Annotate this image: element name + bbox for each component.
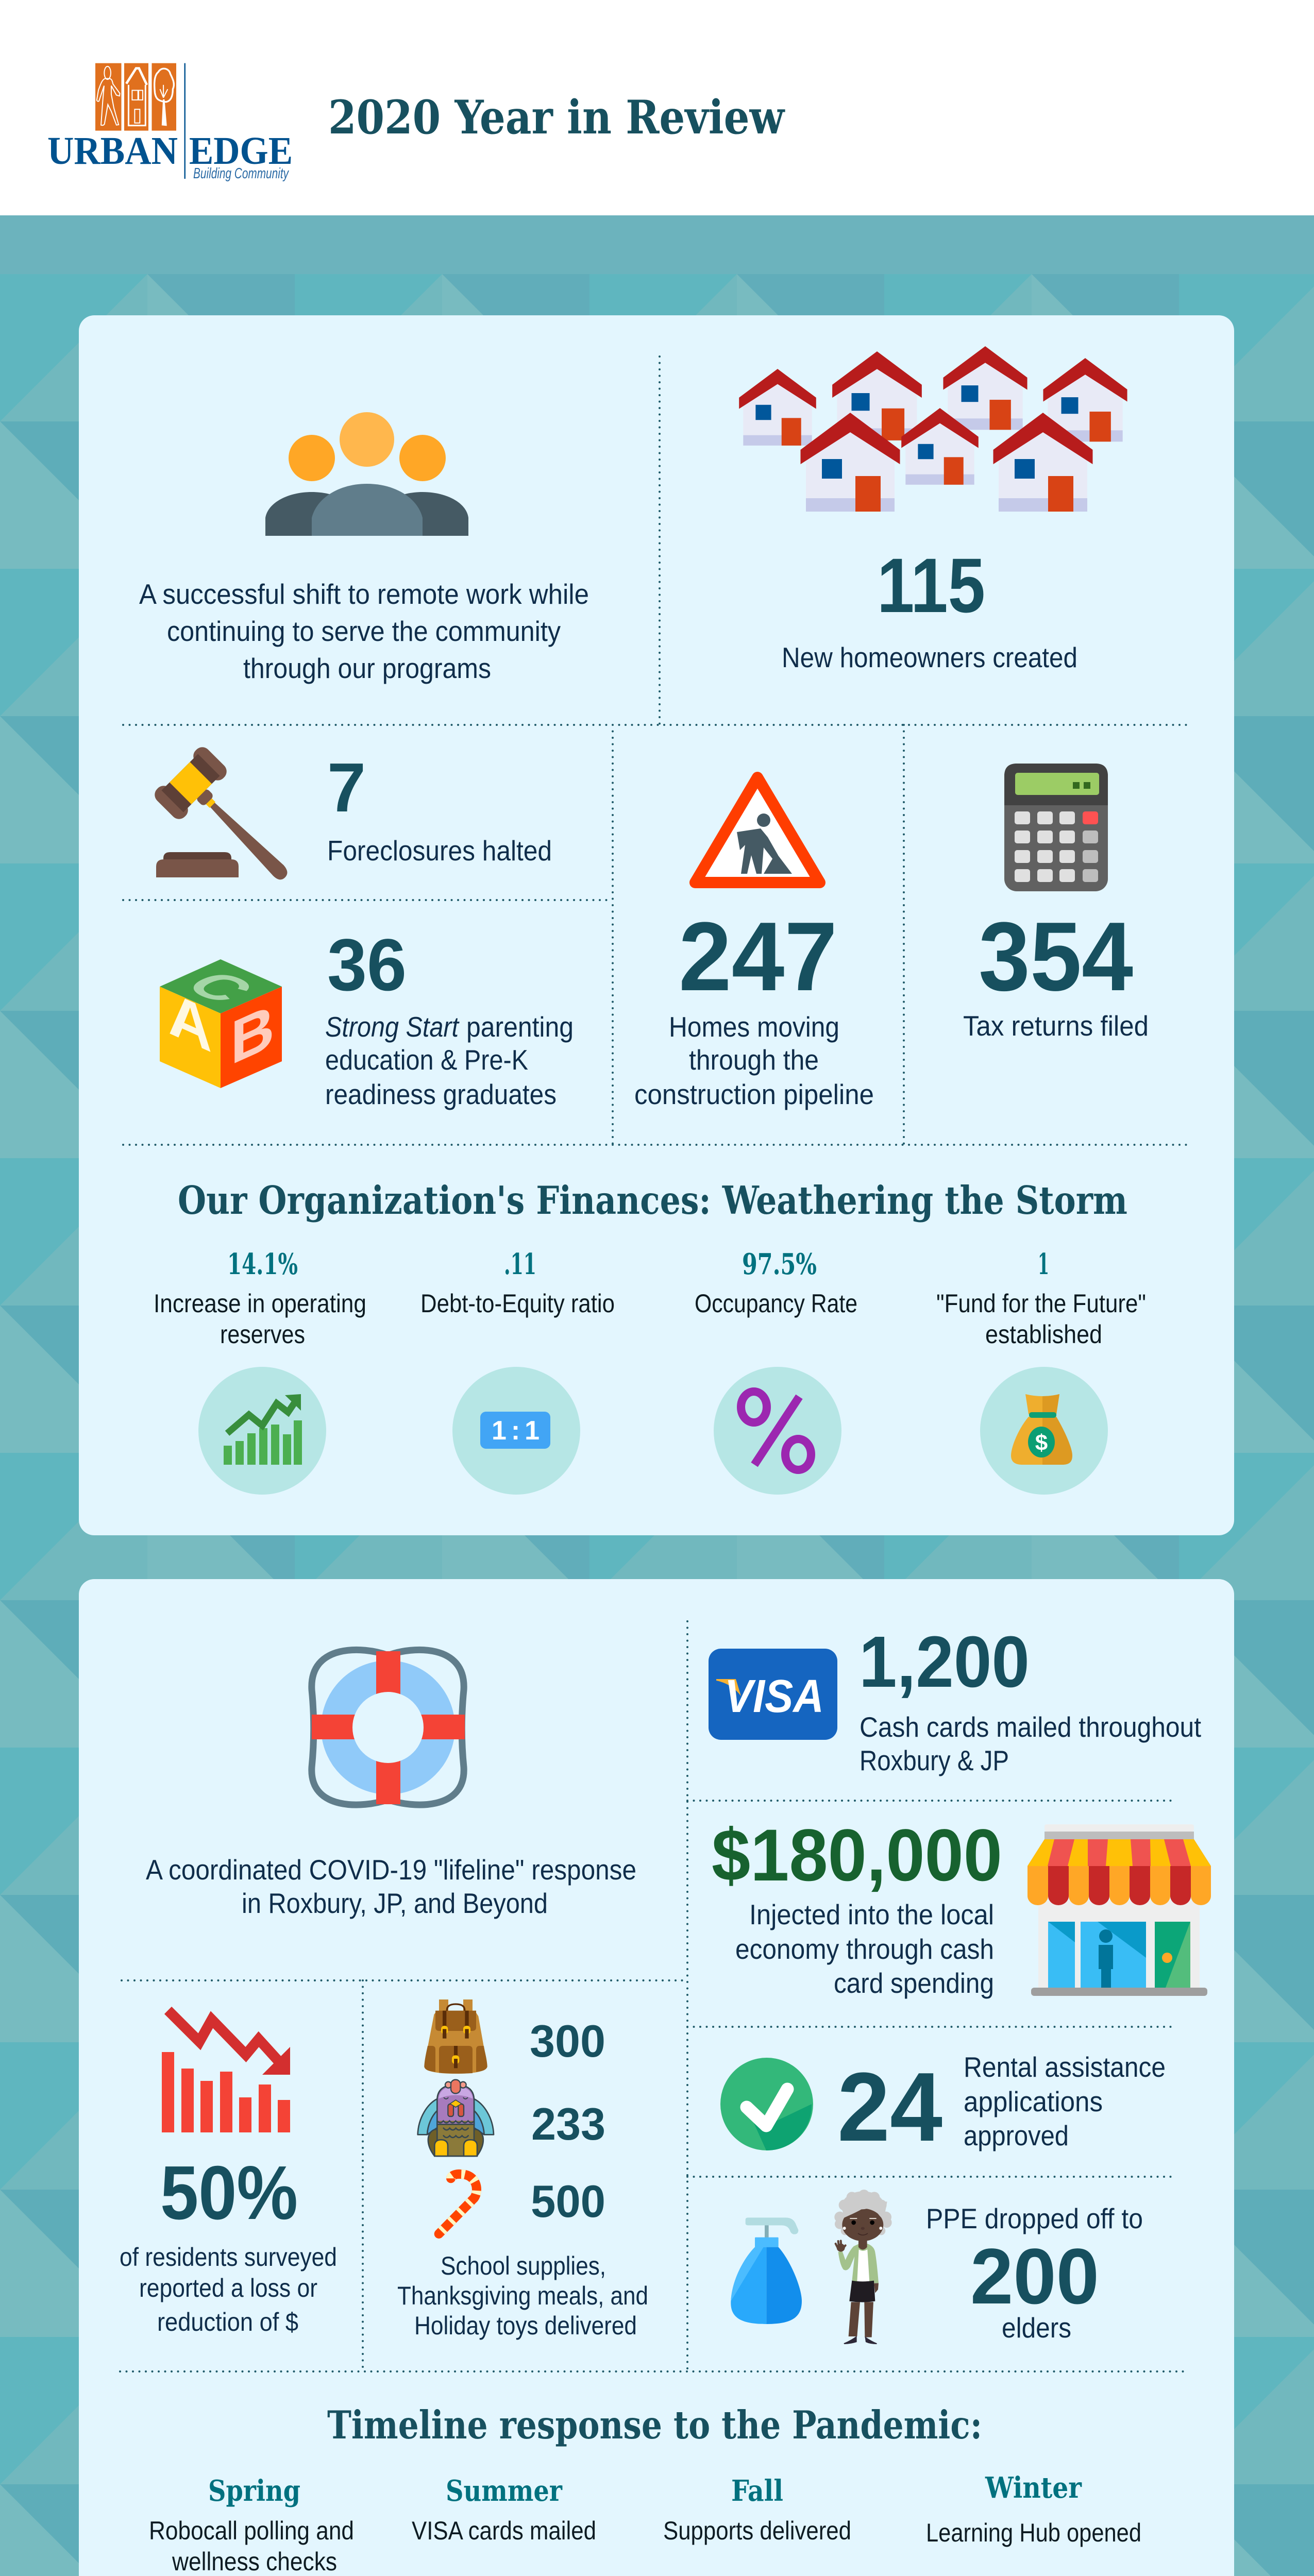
stat: 24 rental assistance: approved — [964, 2120, 1069, 2151]
finance item: operating reserves: 14.1% — [227, 1247, 298, 1281]
finance item: fund for the future: $ — [1035, 1430, 1048, 1455]
stat: 200 elders — [926, 2202, 1143, 2344]
stat: $180,000 injected: economy through cash — [735, 1933, 994, 1965]
stat: 50% — [120, 2150, 337, 2336]
finance item: operating reserves: Increase in operating — [154, 1289, 366, 1318]
timeline: spring — [149, 2474, 354, 2576]
panel: COVID-19 lifeline response — [79, 1579, 1234, 2576]
stat: 24 rental assistance: applications — [964, 2086, 1103, 2117]
stat: 300: 300 — [530, 2015, 605, 2066]
stat: 354: 354 — [979, 902, 1133, 1011]
stat: 500: 500 — [531, 2176, 605, 2227]
stat: 200 elders: 200 — [970, 2232, 1099, 2320]
icon: lifebuoy — [312, 1650, 465, 1805]
icon: ABC block — [160, 959, 282, 1088]
icon: Visa card — [709, 1649, 837, 1740]
timeline: summer: VISA cards mailed — [412, 2516, 596, 2545]
stat: 200 elders: elders — [1002, 2312, 1071, 2344]
label: foreclosures: Foreclosures halted — [327, 835, 552, 867]
heading: finances: Our Organization's Finances: Weathering the Storm — [178, 1178, 1127, 1223]
finance item: fund for the future — [936, 1247, 1146, 1495]
icon: elder — [834, 2190, 892, 2344]
icon: construction sign — [695, 777, 820, 883]
timeline: spring: Robocall polling and — [149, 2516, 354, 2545]
stat: $180,000 injected: $180,000 — [712, 1815, 1002, 1896]
icon: ABC block: B — [230, 991, 275, 1078]
finance item: fund for the future: "Fund for the Future" — [936, 1289, 1146, 1318]
logo: Urban Edge: EDGE — [189, 129, 293, 173]
finance item: occupancy rate: Occupancy Rate — [695, 1289, 857, 1318]
label: deliveries: School supplies, — [441, 2251, 606, 2280]
icon: ABC block: C — [170, 965, 269, 1009]
icon: storefront — [1027, 1824, 1211, 1996]
finance item: fund for the future: established — [985, 1320, 1102, 1349]
timeline: fall — [663, 2474, 851, 2576]
logo: Urban Edge — [47, 63, 293, 182]
label: homeowners: New homeowners created — [782, 641, 1077, 673]
timeline: spring: wellness checks — [172, 2547, 337, 2576]
timeline: winter: Learning Hub opened — [926, 2518, 1141, 2547]
icon: neighborhood houses — [739, 346, 1127, 512]
finance item: operating reserves — [154, 1247, 366, 1495]
icon: candy cane — [439, 2174, 477, 2234]
text: remote work: A successful shift to remote work while — [139, 578, 589, 610]
finance item: debt to equity: .11 — [504, 1247, 536, 1281]
icon: Visa card: VISA — [725, 1671, 824, 1722]
finance item: occupancy rate — [695, 1247, 857, 1495]
timeline: fall: Fall — [731, 2474, 783, 2508]
stat: 1,200 cash cards: 1,200 — [859, 1621, 1030, 1702]
text: lifeline response: in Roxbury, JP, and Beyond — [242, 1887, 548, 1919]
icon: remote work team — [265, 412, 468, 536]
finance item: debt to equity: Debt-to-Equity ratio — [420, 1289, 615, 1318]
text: remote work: through our programs — [243, 652, 491, 684]
stat: 50%: reported a loss or — [139, 2274, 317, 2302]
stat: 247: 247 — [679, 902, 837, 1011]
timeline: spring: Spring — [208, 2474, 300, 2508]
stat: 24 rental assistance: 24 — [837, 2053, 942, 2162]
finance item: operating reserves: reserves — [220, 1320, 305, 1349]
label: Strong Start: readiness graduates — [325, 1078, 557, 1110]
label: deliveries: Thanksgiving meals, and — [397, 2281, 648, 2310]
stat: 24 rental assistance: Rental assistance — [964, 2051, 1166, 2083]
text: lifeline response: A coordinated COVID-19 "lifeline" response — [146, 1854, 636, 1886]
icon: soap bottle — [731, 2217, 802, 2324]
stat: 1,200 cash cards: Cash cards mailed throughout — [860, 1711, 1201, 1743]
stat: 24 rental assistance — [837, 2051, 1166, 2162]
label: Strong Start — [325, 1011, 574, 1110]
icon: backpack — [424, 1999, 487, 2074]
stat: 233: 233 — [531, 2098, 605, 2149]
label: deliveries — [397, 2251, 648, 2340]
icon: calculator — [1004, 764, 1108, 891]
top teal band — [0, 215, 1314, 274]
icon: check mark — [720, 2058, 813, 2150]
stat: $180,000 injected: card spending — [834, 1967, 994, 1999]
logo: Urban Edge: Building Community — [193, 165, 289, 182]
logo: Urban Edge: URBAN — [47, 129, 178, 173]
stat: 50%: 50% — [160, 2150, 298, 2235]
stat: 50%: reduction of $ — [157, 2308, 298, 2336]
title: 2020 Year in Review — [328, 90, 785, 145]
icon: gavel — [151, 744, 311, 903]
finance item: occupancy rate: 97.5% — [742, 1247, 817, 1281]
icon: ABC block: A — [168, 978, 212, 1066]
timeline: fall: Supports delivered — [663, 2516, 851, 2545]
panel: organization highlights and finances — [79, 315, 1234, 1535]
label: homes pipeline — [634, 1011, 874, 1110]
stat: 1,200 cash cards: Roxbury & JP — [860, 1744, 1009, 1776]
stat: 7: 7 — [327, 749, 366, 826]
stat: 200 elders: PPE dropped off to — [926, 2202, 1143, 2234]
label: deliveries: Holiday toys delivered — [414, 2311, 637, 2340]
timeline: winter: Winter — [985, 2471, 1082, 2505]
stat: 115: 115 — [877, 542, 985, 629]
text: remote work: continuing to serve the community — [167, 615, 561, 647]
label: homes pipeline: Homes moving — [669, 1011, 839, 1043]
icon: declining chart — [162, 2010, 290, 2132]
label: Strong Start: Strong Start — [325, 1011, 460, 1043]
timeline: winter — [926, 2471, 1141, 2576]
finance item: debt to equity — [420, 1247, 615, 1495]
header background — [0, 0, 1314, 215]
label: homes pipeline: through the — [689, 1044, 819, 1076]
stat: 36: 36 — [327, 924, 407, 1006]
stat: $180,000 injected — [712, 1815, 1002, 1999]
label: tax returns: Tax returns filed — [963, 1010, 1149, 1042]
timeline: summer — [412, 2474, 596, 2576]
stat: 1,200 cash cards — [859, 1621, 1201, 1776]
stat: $180,000 injected: Injected into the local — [749, 1899, 994, 1930]
finance item: debt to equity: 1:1 — [492, 1416, 540, 1446]
heading: timeline: Timeline response to the Pandemic: — [327, 2402, 982, 2448]
label: Strong Start: parenting — [466, 1011, 574, 1043]
icon: turkey — [418, 2080, 494, 2156]
text: lifeline response — [146, 1854, 636, 1919]
label: homes pipeline: construction pipeline — [634, 1078, 874, 1110]
finance item: fund for the future: 1 — [1038, 1247, 1049, 1281]
stat: 50%: of residents surveyed — [120, 2243, 337, 2272]
timeline: summer: Summer — [446, 2474, 563, 2508]
label: Strong Start: education & Pre-K — [325, 1044, 528, 1076]
text: remote work — [139, 578, 589, 684]
